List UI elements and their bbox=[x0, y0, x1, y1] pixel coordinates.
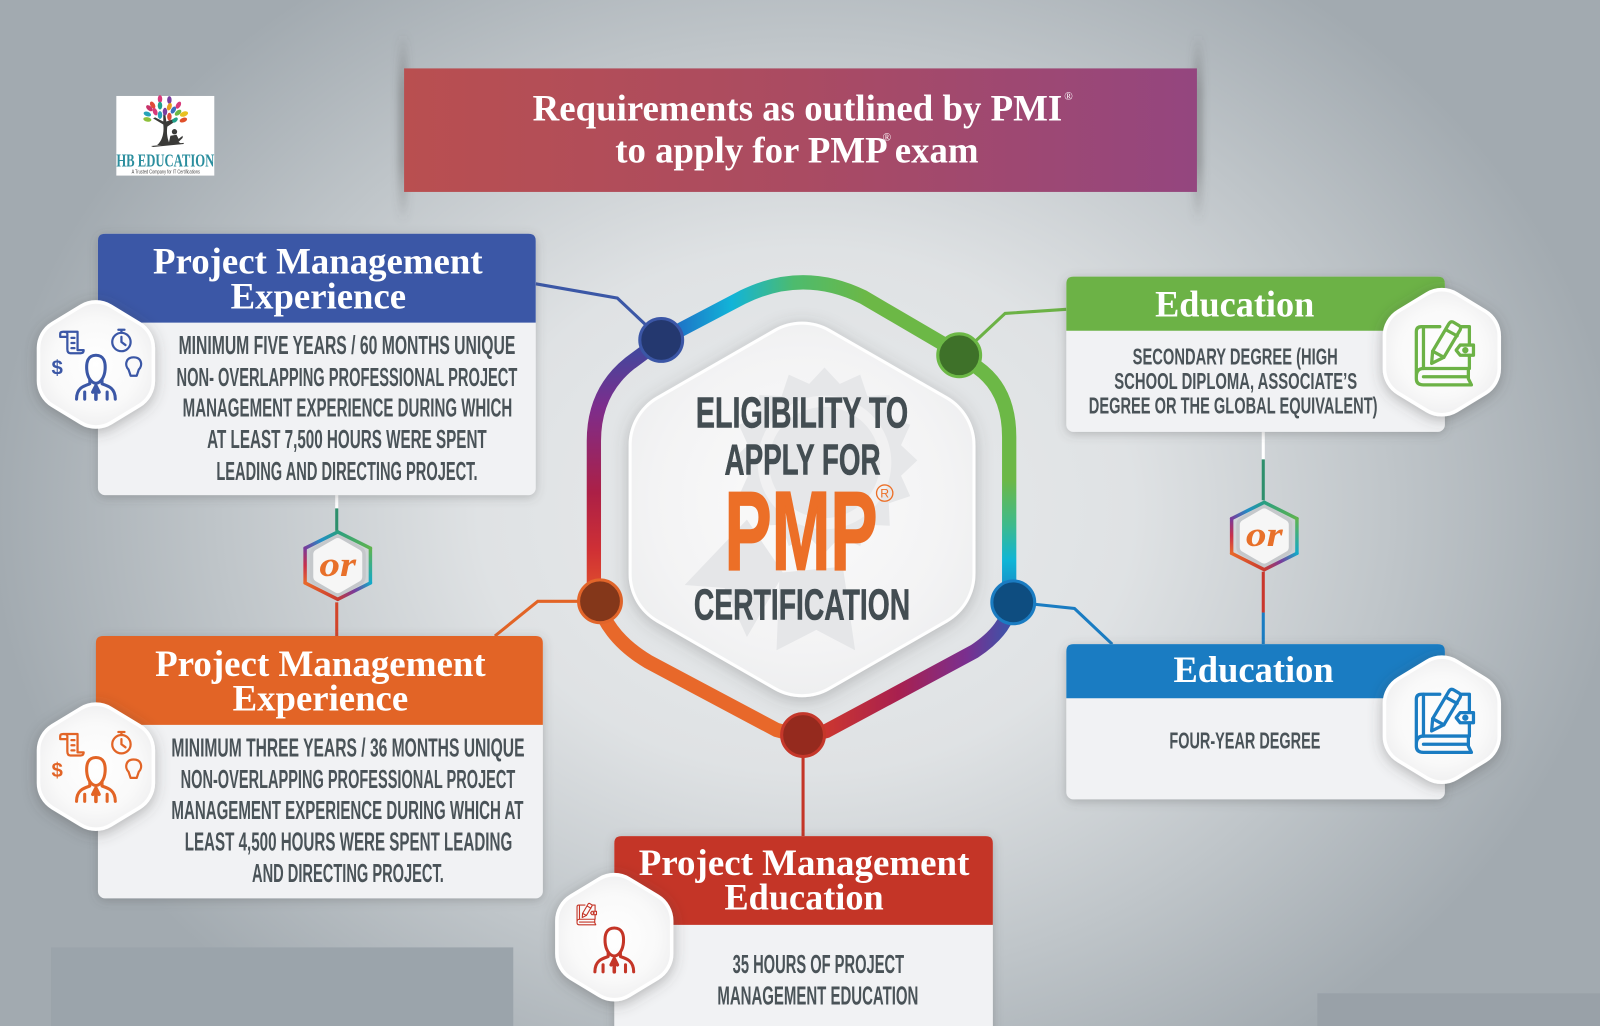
body text bbox=[1089, 343, 1378, 418]
icon: manager red bbox=[577, 903, 643, 972]
or text: or bbox=[1246, 515, 1283, 554]
heading: Education bbox=[1155, 283, 1314, 324]
heading line 2: Experience bbox=[231, 275, 406, 316]
title text line 1: Requirements as outlined by PMI bbox=[533, 87, 1062, 128]
body text: NON-OVERLAPPING PROFESSIONAL PROJECT bbox=[181, 766, 516, 794]
body text: NON- OVERLAPPING PROFESSIONAL PROJECT bbox=[177, 364, 518, 392]
body text: DEGREE OR THE GLOBAL EQUIVALENT) bbox=[1089, 392, 1378, 418]
body text: MANAGEMENT EXPERIENCE DURING WHICH bbox=[183, 395, 512, 423]
body text: SCHOOL DIPLOMA, ASSOCIATE’S bbox=[1114, 368, 1357, 394]
or badge left bbox=[305, 532, 370, 599]
body text: MINIMUM THREE YEARS / 36 MONTHS UNIQUE bbox=[171, 734, 524, 762]
panel: education blue bbox=[1066, 644, 1445, 799]
body text: SECONDARY DEGREE (HIGH bbox=[1133, 343, 1338, 369]
registered mark: R bbox=[880, 487, 889, 501]
heading line 2: Education bbox=[724, 877, 884, 918]
registered mark bbox=[877, 485, 893, 501]
body text: AT LEAST 7,500 HOURS WERE SPENT bbox=[207, 426, 487, 454]
registered mark 2: ® bbox=[883, 132, 892, 144]
title text line 2: to apply for PMP exam bbox=[615, 129, 979, 170]
body text bbox=[171, 734, 524, 888]
headline certification: CERTIFICATION bbox=[694, 581, 910, 630]
logo: HB Education bbox=[116, 95, 215, 176]
icon: manager orange bbox=[51, 732, 141, 801]
icon: manager blue bbox=[51, 330, 141, 399]
connector lines bbox=[337, 284, 1263, 836]
body text: AND DIRECTING PROJECT. bbox=[252, 860, 444, 888]
central hexagon bbox=[685, 368, 919, 650]
icon: book green bbox=[1413, 319, 1473, 386]
ring nodes bbox=[579, 319, 1035, 756]
or badge right bbox=[1232, 502, 1297, 570]
body text: 35 HOURS OF PROJECT bbox=[733, 951, 904, 979]
headline line 2: APPLY FOR bbox=[724, 436, 881, 485]
body text: MINIMUM FIVE YEARS / 60 MONTHS UNIQUE bbox=[179, 332, 515, 360]
panel: project management education bbox=[614, 836, 993, 1026]
body text: MANAGEMENT EXPERIENCE DURING WHICH AT bbox=[171, 797, 524, 825]
panel: education green bbox=[1066, 277, 1445, 432]
headline PMP: PMP bbox=[724, 468, 878, 594]
body text: LEAST 4,500 HOURS WERE SPENT LEADING bbox=[185, 828, 512, 856]
panel: project management experience blue bbox=[98, 234, 536, 495]
or text: or bbox=[319, 545, 357, 584]
bottom right grey block bbox=[1317, 993, 1600, 1026]
logo: HB Education: HB EDUCATION bbox=[116, 150, 215, 170]
panel: project management experience orange bbox=[96, 636, 543, 898]
heading line 2: Experience bbox=[233, 678, 408, 719]
icon: book blue bbox=[1413, 686, 1473, 753]
body text: FOUR-YEAR DEGREE bbox=[1169, 727, 1320, 753]
heading: Project Management bbox=[155, 643, 486, 684]
central hexagon ring bbox=[594, 282, 1010, 737]
heading: Project Management bbox=[639, 842, 970, 883]
heading: Education bbox=[1173, 649, 1334, 690]
bottom left grey block bbox=[51, 947, 513, 1026]
banner shadows bbox=[399, 33, 1202, 223]
body text bbox=[177, 332, 518, 486]
title banner bbox=[404, 68, 1197, 192]
heading: Project Management bbox=[153, 241, 483, 282]
headline: eligibility to apply for: ELIGIBILITY TO bbox=[696, 389, 908, 438]
body text: LEADING AND DIRECTING PROJECT. bbox=[216, 458, 478, 486]
logo: HB Education: A Trusted Company for IT Certifications bbox=[132, 170, 200, 176]
registered mark 1: ® bbox=[1064, 91, 1073, 103]
body text: MANAGEMENT EDUCATION bbox=[717, 983, 918, 1011]
body text bbox=[717, 951, 918, 1011]
ribbon watermark bbox=[685, 368, 917, 650]
